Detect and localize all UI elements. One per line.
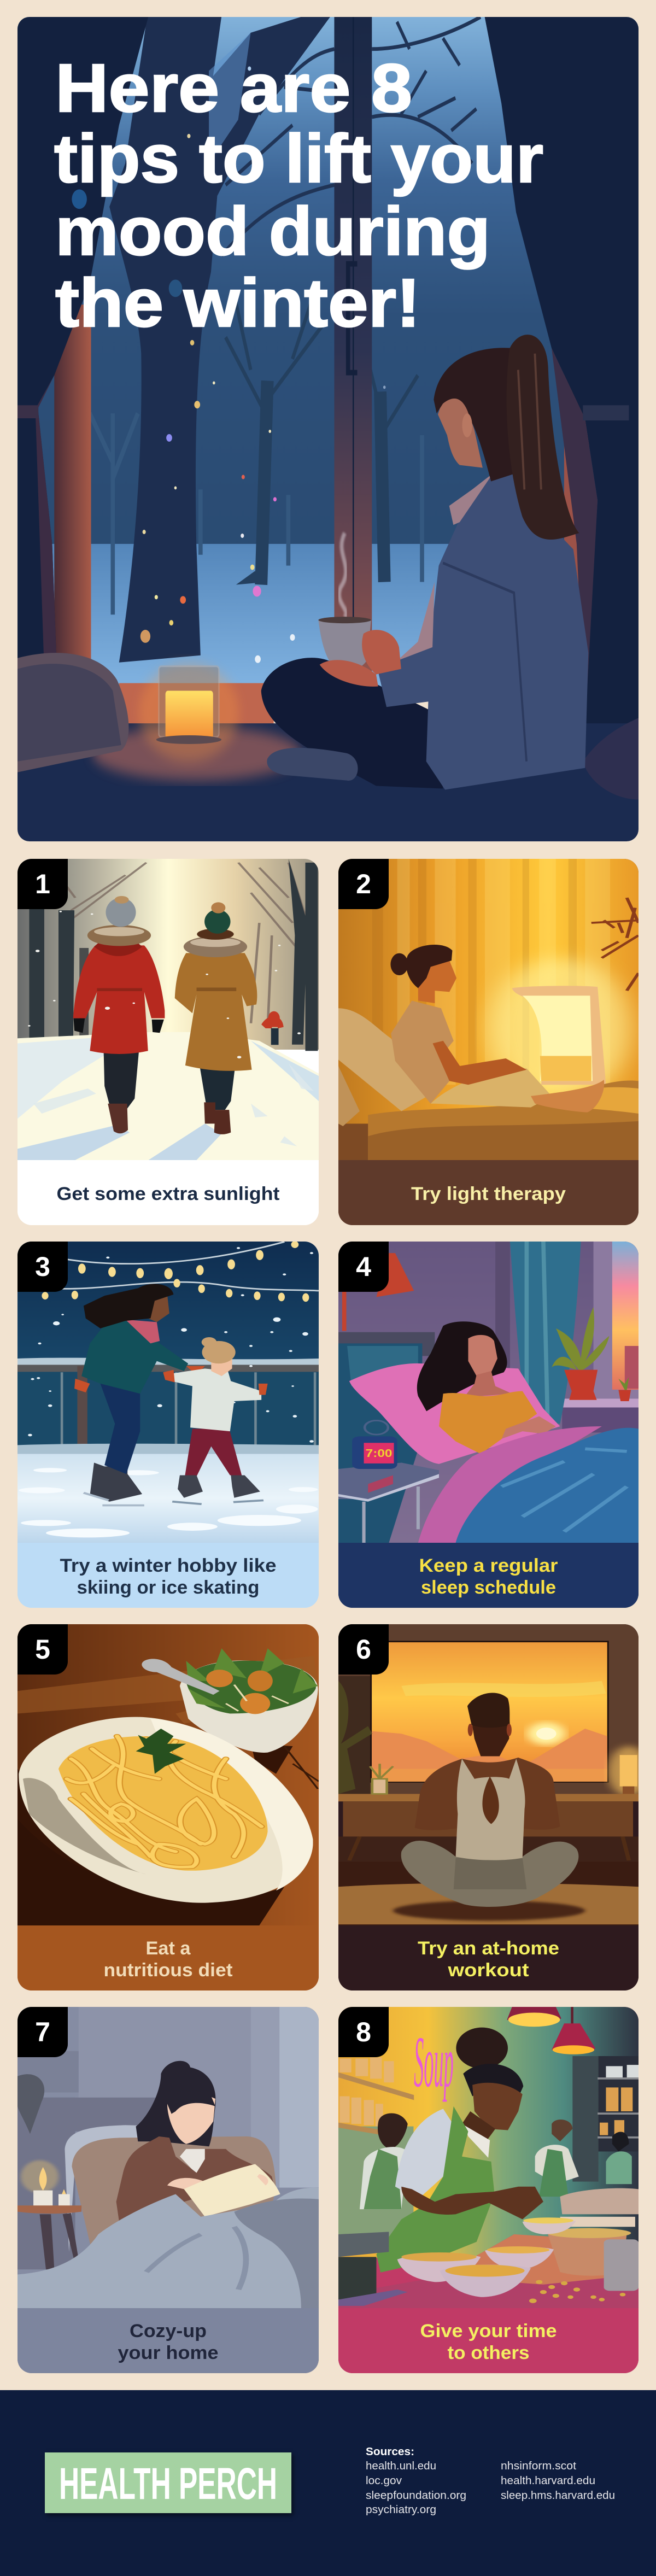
string lights bbox=[42, 1241, 319, 1302]
snowflakes bbox=[28, 1247, 314, 1443]
illustration: pasta plate and salad bowl bbox=[17, 1624, 319, 1925]
number badge: 3 bbox=[35, 1251, 50, 1282]
shelves bbox=[338, 2056, 639, 2182]
number badge bbox=[17, 1624, 68, 1675]
lamps bbox=[507, 2007, 595, 2054]
spoon bbox=[142, 1659, 220, 1695]
title: the winter! bbox=[55, 265, 420, 341]
headboard bbox=[338, 1332, 435, 1356]
number badge: 5 bbox=[35, 1634, 50, 1665]
sources list: loc.gov bbox=[366, 2475, 402, 2487]
man meditating bbox=[401, 1693, 578, 1907]
curtains bbox=[17, 17, 639, 734]
number badge: 7 bbox=[35, 2017, 50, 2047]
sources list: health.harvard.edu bbox=[501, 2475, 595, 2487]
salad bowl bbox=[180, 1648, 318, 1753]
number badge bbox=[338, 1242, 389, 1292]
caption bbox=[17, 1543, 319, 1608]
bedside table and clock bbox=[338, 1420, 439, 1543]
panel: tip 7 cozy home bbox=[17, 2007, 319, 2373]
plate bbox=[19, 1717, 313, 1903]
caption: nutritious diet bbox=[104, 1960, 233, 1981]
bed and pillows bbox=[338, 1008, 639, 1160]
window frame bbox=[54, 17, 589, 740]
counter and bowls bbox=[338, 2188, 639, 2308]
caption: your home bbox=[118, 2343, 219, 2363]
caption: Try light therapy bbox=[411, 1184, 566, 1204]
caption: sleep schedule bbox=[421, 1577, 556, 1598]
caption bbox=[338, 1925, 639, 1990]
number badge: 8 bbox=[356, 2017, 371, 2047]
hero illustration bbox=[17, 17, 639, 841]
number badge: 1 bbox=[35, 869, 50, 899]
bedside table and clock: 7:00 bbox=[366, 1447, 392, 1459]
illustration: woman wrapped in a blanket with candles bbox=[17, 2007, 319, 2308]
number badge: 2 bbox=[356, 869, 371, 899]
TV sunset bbox=[370, 1641, 650, 1796]
sources list bbox=[366, 2446, 615, 2516]
panel: tip 8 give your time bbox=[338, 2007, 639, 2373]
caption bbox=[17, 2308, 319, 2373]
sources list: nhsinform.scot bbox=[501, 2460, 576, 2472]
illustration: volunteers in a soup kitchen bbox=[338, 2007, 639, 2308]
blanket bbox=[17, 2188, 319, 2308]
caption bbox=[338, 2308, 639, 2373]
illustration: two women walking in snow bbox=[17, 859, 319, 1160]
caption: skiing or ice skating bbox=[77, 1577, 259, 1598]
main volunteer bbox=[376, 2028, 543, 2273]
plant bbox=[591, 898, 639, 991]
pillow bbox=[349, 1363, 560, 1464]
caption: workout bbox=[447, 1960, 529, 1981]
blankets bbox=[418, 1426, 639, 1543]
title: mood during bbox=[55, 194, 490, 270]
number badge: 4 bbox=[356, 1251, 371, 1282]
woman sitting with mug bbox=[261, 335, 588, 790]
number badge bbox=[17, 2007, 68, 2057]
sources list: sleepfoundation.org bbox=[366, 2490, 466, 2502]
woman bbox=[116, 2061, 280, 2222]
lamp bbox=[512, 986, 606, 1085]
woman skater bbox=[74, 1284, 205, 1506]
number badge bbox=[338, 859, 389, 909]
panel: tip 5 nutritious diet bbox=[17, 1624, 319, 1990]
caption: Keep a regular bbox=[419, 1555, 558, 1576]
sources list: sleep.hms.harvard.edu bbox=[501, 2490, 615, 2502]
illustration: mother and child ice skating bbox=[17, 1242, 319, 1543]
illustration: woman using a light therapy lamp on a bed bbox=[338, 859, 639, 1160]
caption: Try an at-home bbox=[418, 1938, 559, 1959]
parsley bbox=[136, 1729, 186, 1774]
sources list: health.unl.edu bbox=[366, 2460, 436, 2472]
panel: tip 4 sleep schedule bbox=[338, 1242, 639, 1608]
title: Here are 8 bbox=[55, 50, 412, 126]
woman in red coat bbox=[73, 896, 165, 1133]
caption: Try a winter hobby like bbox=[60, 1555, 276, 1576]
panel: tip 3 winter hobby bbox=[17, 1242, 319, 1608]
woman in tan coat bbox=[175, 902, 257, 1134]
woman bbox=[390, 945, 604, 1113]
window seat and cushions bbox=[17, 653, 639, 841]
sources list: Sources: bbox=[366, 2446, 414, 2458]
TV console bbox=[338, 1794, 639, 1925]
winter window view bbox=[17, 17, 639, 690]
caption: Cozy-up bbox=[130, 2321, 207, 2341]
panel: tip 6 at-home workout bbox=[338, 1624, 639, 1990]
number badge bbox=[17, 859, 68, 909]
title bbox=[54, 50, 543, 341]
caption bbox=[338, 1160, 639, 1225]
candles and table bbox=[17, 2161, 81, 2269]
caption bbox=[338, 1543, 639, 1608]
caption bbox=[17, 1925, 319, 1990]
child skater bbox=[163, 1337, 268, 1504]
hero panel: woman with mug looking out of a winter window bbox=[17, 17, 639, 841]
caption: to others bbox=[447, 2343, 529, 2363]
steam bbox=[339, 533, 346, 617]
panel: tip 1 sunlight bbox=[17, 859, 319, 1225]
plant bbox=[552, 1307, 631, 1401]
wall lamp bbox=[342, 1253, 414, 1331]
number badge bbox=[17, 1242, 68, 1292]
illustration: woman in bed with alarm clock bbox=[338, 1242, 639, 1543]
sources list: psychiatry.org bbox=[366, 2504, 436, 2516]
panel: tip 2 light therapy bbox=[338, 859, 639, 1225]
caption bbox=[17, 1160, 319, 1225]
number badge: 6 bbox=[356, 1634, 371, 1665]
footer panel bbox=[0, 2390, 656, 2576]
title: tips to lift your bbox=[54, 121, 543, 197]
candle bbox=[139, 664, 239, 762]
woman bbox=[417, 1321, 556, 1454]
caption: Get some extra sunlight bbox=[57, 1184, 280, 1204]
number badge bbox=[338, 1624, 389, 1675]
caption: Eat a bbox=[145, 1938, 191, 1959]
caption: Give your time bbox=[420, 2321, 557, 2341]
background volunteers bbox=[360, 2113, 632, 2209]
plants bbox=[338, 1681, 372, 1794]
bokeh lights bbox=[72, 67, 385, 663]
number badge bbox=[338, 2007, 389, 2057]
illustration: man meditating in front of a TV bbox=[338, 1624, 639, 1925]
